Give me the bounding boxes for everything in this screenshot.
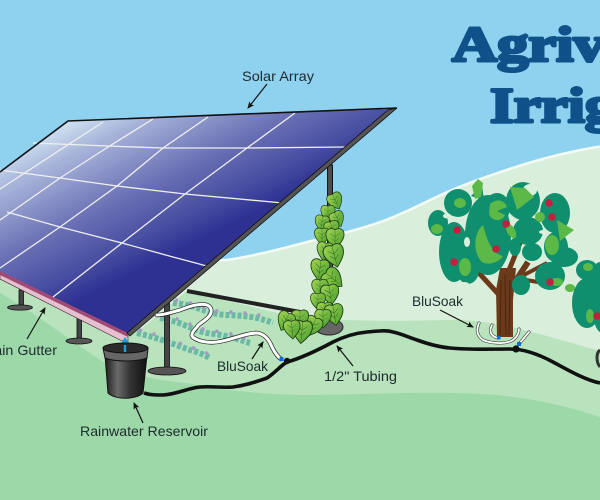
rain gutter [0, 270, 128, 342]
label: tree BluSoak [412, 293, 473, 327]
label: tree BluSoak: BluSoak [412, 293, 464, 309]
label: solar array: Solar Array [242, 68, 314, 84]
back rail [187, 291, 300, 312]
rainwater reservoir bucket [103, 343, 148, 398]
light leaves [431, 179, 575, 292]
label: tubing: 1/2" Tubing [324, 368, 397, 384]
back hill [0, 145, 600, 500]
label: rainwater reservoir [80, 403, 208, 439]
tree trunk and branches [478, 238, 547, 337]
tree foliage [428, 182, 578, 295]
label: rainwater reservoir: Rainwater Reservoir [80, 423, 208, 439]
panel surface [0, 109, 392, 333]
label: field BluSoak [217, 342, 269, 374]
tree connector [512, 345, 520, 353]
label: rain gutter [0, 308, 57, 358]
middle hill [0, 275, 600, 500]
front center leg [148, 303, 186, 375]
front left legs [8, 290, 92, 344]
back support post [328, 165, 332, 325]
plant rows [137, 300, 273, 358]
base stone [315, 319, 343, 335]
label: tubing [324, 346, 397, 384]
panel grid lines [0, 113, 345, 297]
fruit tree [428, 179, 578, 337]
water flow into reservoir [121, 337, 129, 352]
second fruit tree [572, 260, 600, 332]
tree BluSoak ring [477, 323, 529, 346]
front hill [0, 293, 600, 500]
foliage gaps [443, 184, 547, 286]
climbing vine [273, 190, 348, 344]
panel frame side [127, 108, 397, 336]
solar array [0, 108, 397, 342]
title [452, 18, 600, 134]
right edge BluSoak hose [597, 350, 600, 367]
label: field BluSoak: BluSoak [217, 358, 269, 374]
apples [450, 199, 556, 286]
half inch tubing [144, 331, 600, 395]
label: solar array [242, 68, 314, 108]
field connector [280, 357, 290, 364]
panel top edge [0, 108, 397, 172]
field BluSoak hose [157, 304, 281, 359]
